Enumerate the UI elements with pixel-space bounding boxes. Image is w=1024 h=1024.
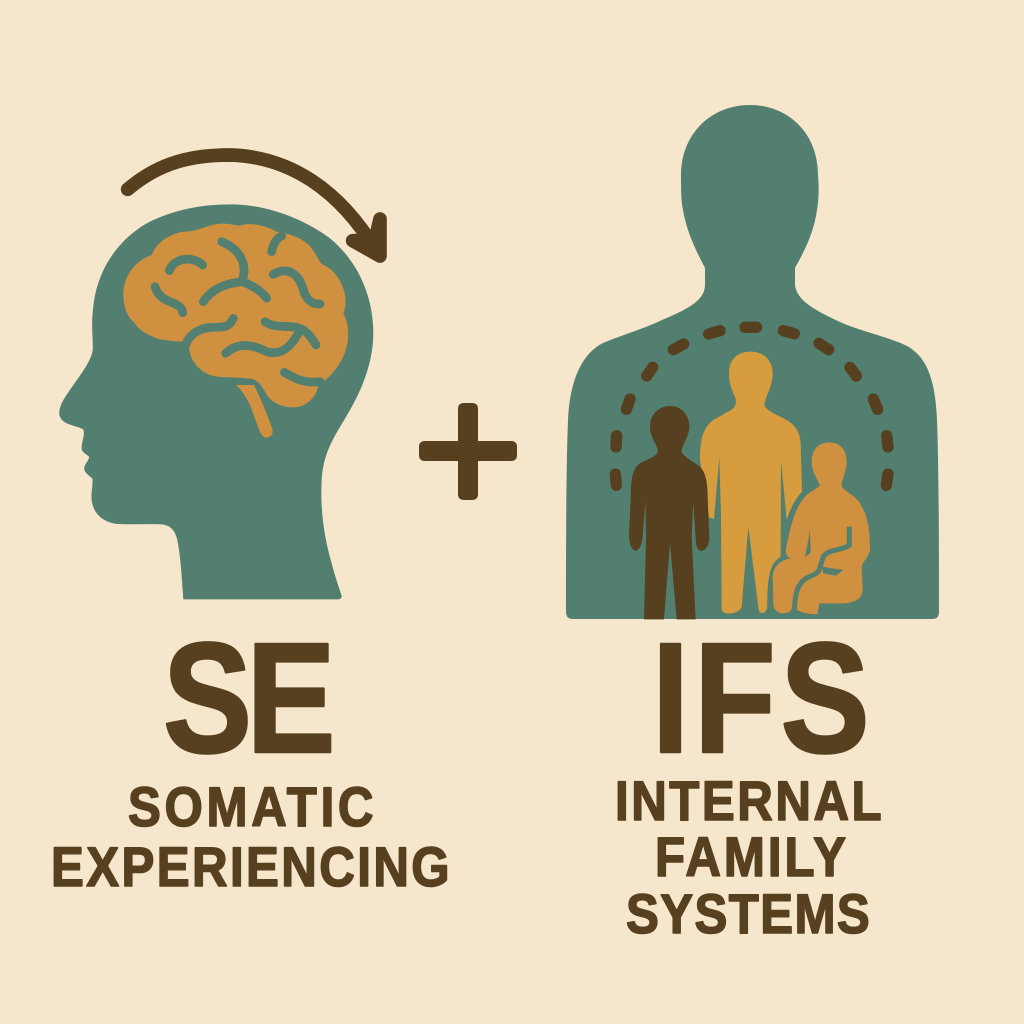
icon: brain — [123, 224, 348, 438]
seated figure cut lines — [794, 527, 849, 613]
text: SOMATIC: SOMATIC — [128, 776, 374, 839]
icon: person silhouette — [566, 105, 939, 619]
figure: seated orange child — [773, 442, 870, 614]
panel: somatic experiencing head icon — [59, 204, 373, 599]
brain lobes — [123, 224, 348, 407]
brain stem — [236, 385, 273, 438]
dashed circle of parts — [615, 327, 888, 485]
icon: head silhouette — [59, 204, 373, 599]
figure: dark brown adult — [629, 406, 709, 619]
panel: internal family systems body icon — [566, 105, 939, 619]
text: FAMILY: FAMILY — [655, 826, 846, 889]
heading: IFS: IFS — [652, 610, 870, 785]
text: INTERNAL: INTERNAL — [615, 770, 882, 833]
plus sign — [419, 403, 517, 500]
figure: tall yellow adult — [700, 352, 802, 614]
arrow: curved arrow over head — [128, 155, 380, 256]
heading: SE: SE — [163, 610, 336, 785]
text: EXPERIENCING: EXPERIENCING — [51, 836, 450, 899]
text: SYSTEMS: SYSTEMS — [626, 883, 870, 946]
family figures — [629, 352, 870, 619]
brain folds — [155, 236, 320, 382]
